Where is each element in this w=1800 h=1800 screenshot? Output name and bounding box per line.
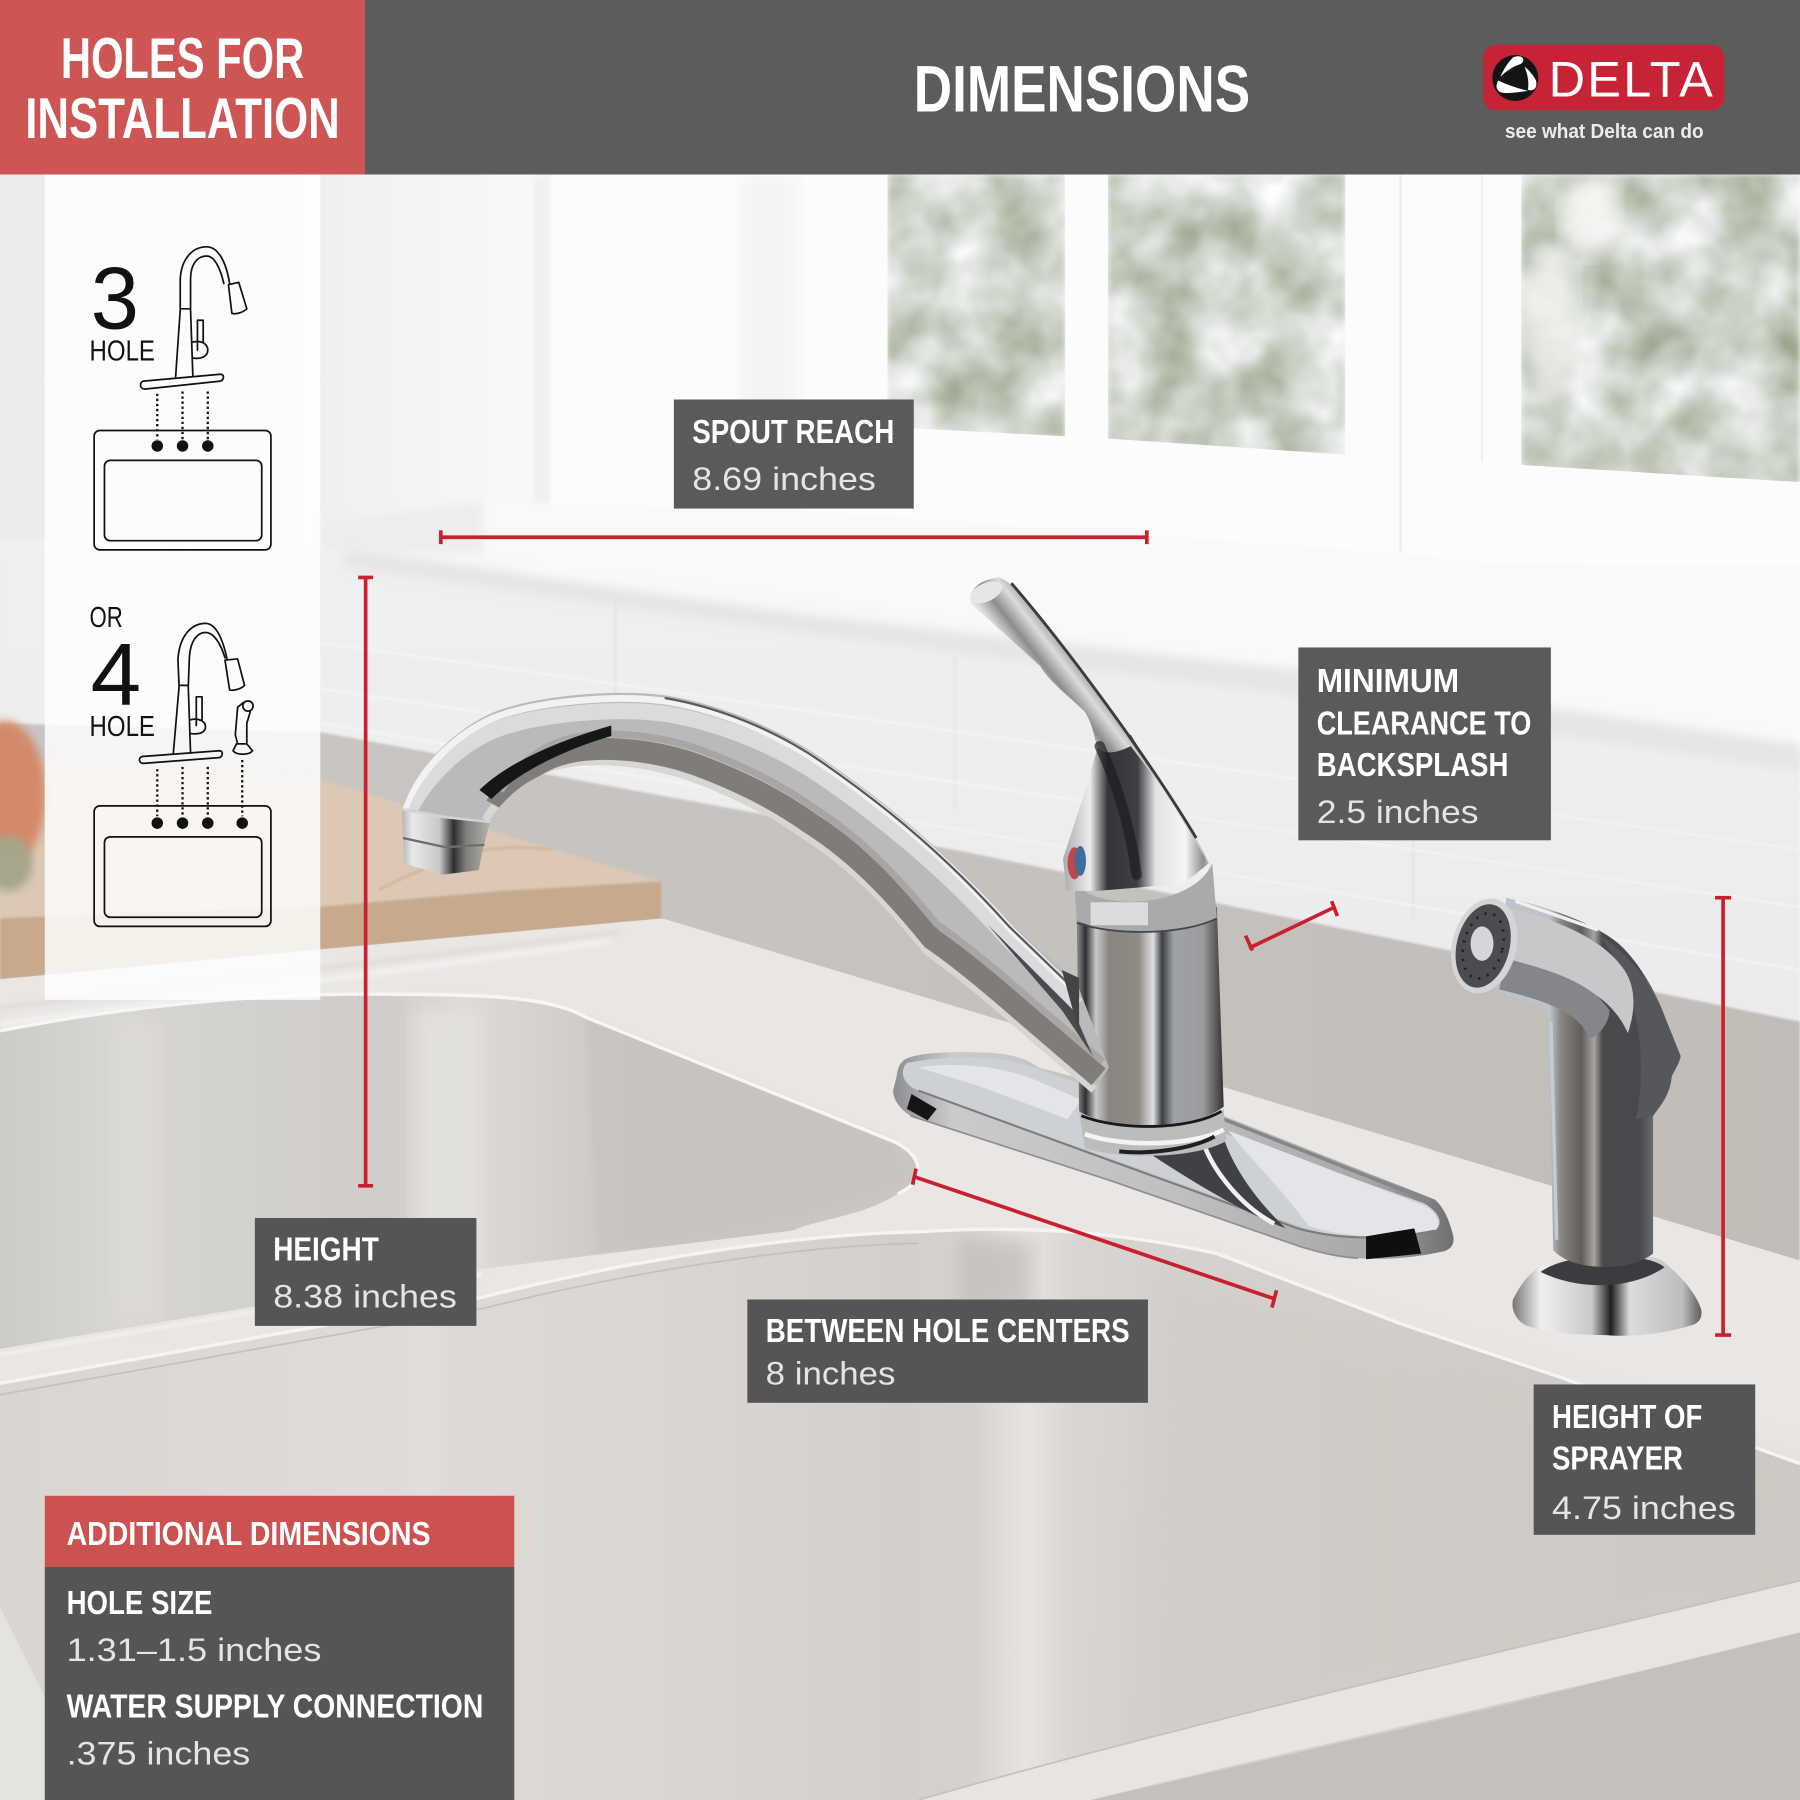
label: backsplash clearance: CLEARANCE TO <box>1317 706 1531 743</box>
base collar <box>1079 1109 1226 1156</box>
heading: holes for installation: HOLES FOR <box>61 27 304 91</box>
dotted hole guides <box>157 760 242 816</box>
label: height: HEIGHT <box>273 1231 379 1268</box>
label: height of sprayer <box>1534 1384 1755 1535</box>
dotted hole guides <box>157 391 208 440</box>
label: backsplash clearance: MINIMUM <box>1317 663 1459 700</box>
logo: delta: DELTA <box>1549 50 1713 107</box>
counter back band <box>0 723 1800 1274</box>
label: height: 8.38 inches <box>273 1279 457 1315</box>
logo: delta: see what Delta can do <box>1505 120 1704 143</box>
spout <box>390 677 1125 1102</box>
label: backsplash clearance <box>1298 647 1551 840</box>
icon: faucet <box>139 623 245 763</box>
window sill <box>321 502 1800 746</box>
sprayer body <box>1499 898 1681 1267</box>
sprayer height dimension line <box>1715 898 1731 1335</box>
number 4: 4 <box>91 625 141 724</box>
height dimension line <box>358 577 373 1186</box>
hole caption: HOLE <box>90 711 155 743</box>
heading: additional dimensions: ADDITIONAL DIMENSIONS <box>67 1516 430 1553</box>
faucet <box>390 577 1454 1259</box>
spray face <box>1441 891 1527 1000</box>
dimension list: HOLE SIZE <box>67 1585 212 1622</box>
dimension list <box>45 1567 514 1800</box>
number 3: 3 <box>91 248 139 347</box>
nozzle <box>402 809 490 875</box>
sprayer base <box>1512 1254 1701 1336</box>
dimension list: WATER SUPPLY CONNECTION <box>67 1688 483 1725</box>
window frame <box>534 174 1800 565</box>
or caption: OR <box>90 602 123 634</box>
dimension list: .375 inches <box>67 1735 250 1771</box>
label: between hole centers: BETWEEN HOLE CENTERS <box>766 1313 1130 1350</box>
title: DIMENSIONS <box>914 52 1250 125</box>
logo: delta <box>1483 45 1724 143</box>
base plate <box>893 1052 1454 1259</box>
label: between hole centers: 8 inches <box>766 1355 895 1391</box>
dimension list: 1.31–1.5 inches <box>67 1632 321 1668</box>
3 hole option <box>90 247 271 550</box>
backsplash clearance dimension line <box>1246 901 1337 951</box>
label: height of sprayer: HEIGHT OF <box>1552 1399 1702 1436</box>
icon: sink with four holes <box>94 806 271 926</box>
right sink basin <box>0 1229 1800 1800</box>
sink front rim <box>0 1581 1800 1800</box>
icon: faucet <box>141 247 247 389</box>
countertop <box>0 918 1800 1800</box>
icon: delta mark <box>1492 55 1538 101</box>
heading: holes for installation: INSTALLATION <box>25 87 340 151</box>
left sink basin <box>0 994 918 1349</box>
spout reach dimension line <box>441 530 1147 544</box>
icon: side sprayer <box>233 701 253 754</box>
label: spout reach: 8.69 inches <box>692 461 876 497</box>
icon: sink with three holes <box>94 430 271 550</box>
cutting board <box>0 758 661 979</box>
header bar <box>0 0 1800 174</box>
label: backsplash clearance: BACKSPLASH <box>1317 747 1508 784</box>
panel: hole options <box>45 174 320 1000</box>
4 hole option <box>90 602 271 926</box>
label: spout reach: SPOUT REACH <box>692 414 894 451</box>
label: backsplash clearance: 2.5 inches <box>1317 794 1479 830</box>
window panes with trees <box>887 174 1800 484</box>
hole centers dimension line <box>913 1169 1277 1308</box>
label: spout reach <box>674 399 914 509</box>
faucet body column <box>1074 863 1224 1125</box>
label: height of sprayer: 4.75 inches <box>1552 1490 1736 1526</box>
sprayer <box>1441 891 1701 1336</box>
tiled backsplash <box>0 540 1800 1033</box>
panel: additional dimensions <box>45 1496 514 1800</box>
heading: additional dimensions <box>45 1496 514 1567</box>
heading: holes for installation <box>0 0 365 174</box>
dimension lines <box>358 530 1731 1335</box>
label: height of sprayer: SPRAYER <box>1552 1440 1683 1477</box>
label: height <box>255 1218 476 1326</box>
lever handle <box>967 577 1209 891</box>
label: between hole centers <box>747 1299 1148 1403</box>
hole caption: HOLE <box>90 335 155 367</box>
tomato <box>0 721 46 868</box>
herbs <box>0 836 32 891</box>
